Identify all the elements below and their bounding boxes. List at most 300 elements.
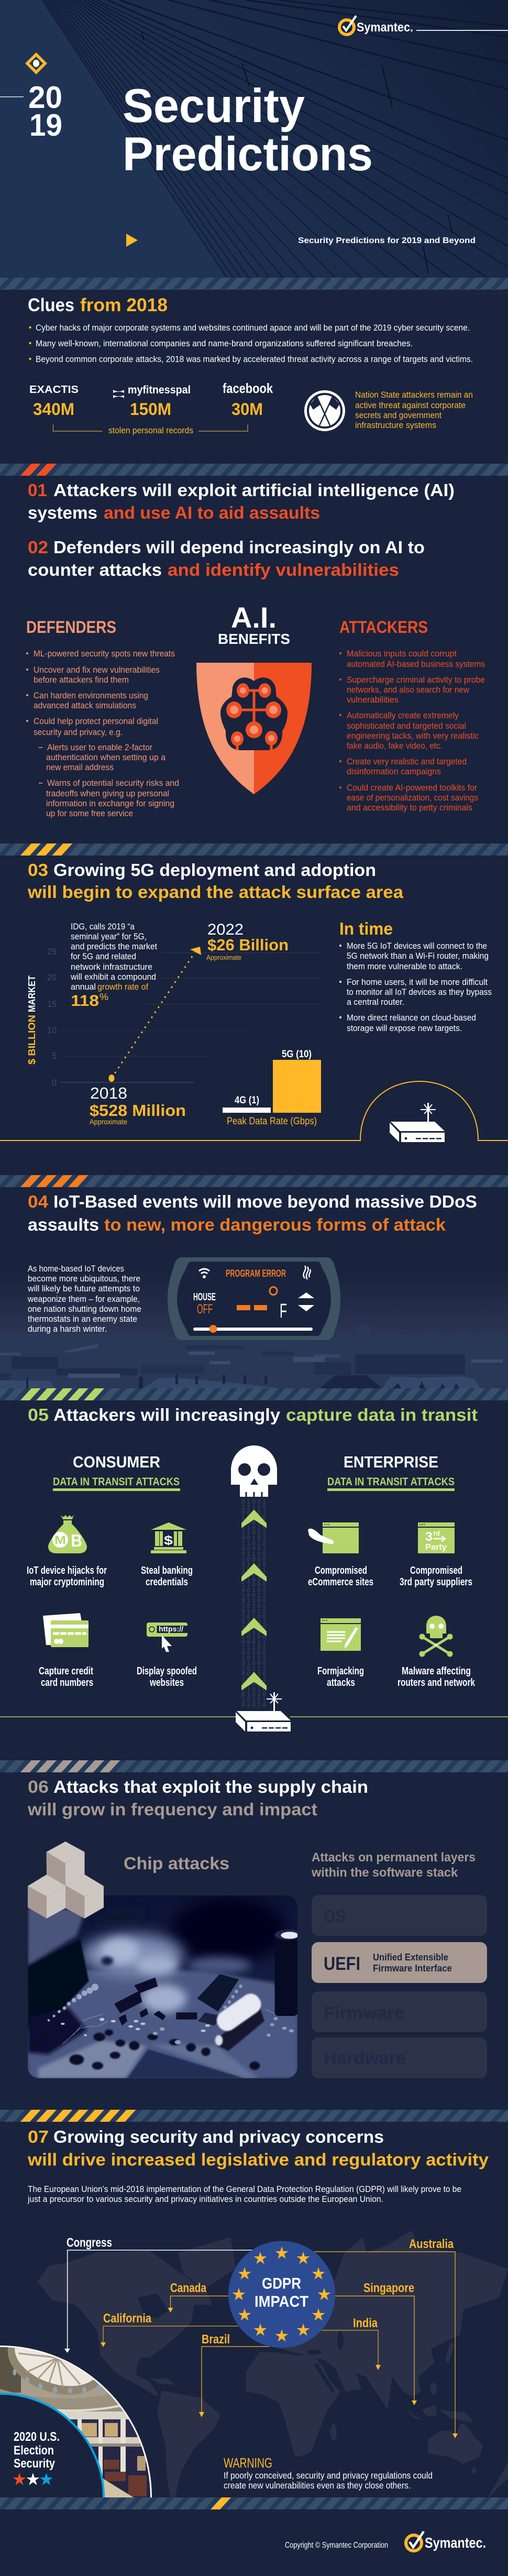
item: banking (141, 1522, 193, 1588)
layer: UEFI (312, 1942, 487, 1983)
heading: 04: 04 (28, 1192, 49, 1211)
title (123, 80, 373, 181)
heading: 05: Attackers will increasingly (53, 1405, 281, 1424)
caption: 3rd party suppliers (400, 1576, 472, 1588)
stat: facebook (223, 380, 273, 419)
bullet list (29, 323, 473, 364)
caption: Formjacking (317, 1665, 364, 1677)
caption: attacks (327, 1677, 355, 1689)
heading: consumer (53, 1453, 180, 1491)
text: IoT description: weaponize them – for example, (27, 1294, 140, 1304)
logo: Symantec: Symantec. (425, 2535, 486, 2551)
callout: nation state (355, 390, 473, 430)
logo: Symantec (406, 2531, 486, 2551)
connector: Canada (168, 2281, 230, 2312)
text: GDPR intro: The European Union’s mid-2018 implementation of the General Data Protection Regulation (GDPR) will likely prove to be (28, 2185, 461, 2194)
binary data stream: 10011 (241, 1592, 268, 1599)
caption: IoT device hijacks for (27, 1565, 107, 1576)
layer: hardware: Hardware (324, 2048, 406, 2067)
list: defenders: authentication when setting up a (46, 753, 166, 762)
item: ecommerce (308, 1522, 373, 1588)
heading: 05: capture data in transit (286, 1405, 478, 1424)
list: attackers: Supercharge criminal activity to probe (347, 675, 485, 685)
binary data stream: 01001 (241, 1498, 268, 1506)
binary data stream: 00101 (241, 1509, 268, 1516)
photo: capitol dome (0, 2345, 152, 2497)
badge: GDPR impact: IMPACT (255, 2293, 308, 2310)
text: IDG callout: seminal year” for 5G, (71, 932, 147, 941)
axis title: $ BILLION (27, 1015, 37, 1065)
callout: warning: WARNING (224, 2455, 272, 2471)
heading: enterprise: ENTERPRISE (344, 1453, 438, 1471)
list: defenders: ML-powered security spots new threats (34, 649, 175, 659)
label: 2018: 2018 (90, 1084, 127, 1102)
bar chart: peak data rate: Peak Data Rate (Gbps) (227, 1116, 317, 1127)
list: defenders: Can harden environments using (34, 691, 148, 700)
list: attackers: networks, and also search for new (347, 685, 469, 695)
binary data stream: 01010 (241, 1525, 268, 1532)
heading: defenders: DEFENDERS (26, 618, 116, 637)
readout (237, 1287, 287, 1322)
icon: flame (303, 1266, 311, 1279)
icon: skull (231, 1445, 277, 1497)
heading: 04: IoT-Based events will move beyond massive DDoS (53, 1192, 477, 1211)
label: 2022: $26 Billion (207, 936, 289, 954)
title: Predictions (123, 128, 373, 181)
binary data stream: 10000 (241, 1555, 268, 1563)
panel: hero (0, 0, 508, 278)
stat: facebook: facebook (223, 380, 273, 396)
item: formjacking (317, 1618, 364, 1689)
binary data stream: 10111 (241, 1654, 268, 1662)
icon: money bag: M (54, 1533, 66, 1547)
caption: Compromised (410, 1565, 462, 1576)
binary data stream: 10001 (241, 1566, 268, 1573)
list: defenders: Could help protect personal digital (34, 717, 158, 726)
list: defenders: tradeoffs when giving up personal (46, 789, 169, 798)
bullet list: Cyber hacks of major corporate systems and websites continued apace and will be part of the 2019 cyber security scene. (36, 323, 470, 333)
icon: skull and bones (419, 1616, 452, 1657)
panel: 2020 election security (0, 2345, 152, 2497)
list: defenders: Alerts user to enable 2-factor (47, 743, 152, 752)
icon: third party (418, 1522, 455, 1553)
list: attackers: ease of personalization, cost savings (347, 793, 478, 803)
subtitle: Security Predictions for 2019 and Beyond (298, 236, 476, 245)
connector: India: India (353, 2316, 378, 2330)
callout: warning (224, 2455, 433, 2491)
list: attackers: vulnerabilities (347, 695, 399, 705)
list: defenders: advanced attack simulations (34, 701, 136, 710)
heading: 07: will drive increased legislative and regulatory activity (27, 2150, 489, 2169)
heading: attacks on permanent layers: Attacks on permanent layers (312, 1850, 476, 1865)
stat: Exactis: 340M (33, 400, 74, 419)
stat: myfitnesspal: 150M (130, 400, 171, 419)
callout: warning: create new vulnerabilities even as they close others. (224, 2480, 411, 2491)
caption (141, 1565, 193, 1588)
heading (28, 295, 168, 315)
caption: credentials (146, 1576, 188, 1588)
list: defenders: Uncover and fix new vulnerabilities (34, 665, 160, 675)
band: section 04 (0, 1175, 508, 1187)
binary data stream: 01001 (241, 1571, 268, 1579)
chart: 5G market growth: 20 (47, 972, 57, 982)
bar chart: peak data rate: 5G (10) (282, 1049, 312, 1060)
list: in time: More 5G IoT devices will connect to the (347, 941, 487, 951)
label: 2018: Approximate (90, 1117, 127, 1126)
item: malware (397, 1616, 476, 1689)
binary data stream: 10001 (241, 1681, 268, 1688)
badge: GDPR impact: GDPR (262, 2275, 301, 2293)
stat: Exactis (29, 384, 79, 419)
callout: nation state: secrets and government (355, 410, 441, 420)
heading: 04: to new, more dangerous forms of attack (104, 1215, 446, 1234)
heading: 06: Attacks that exploit the supply chain (53, 1777, 368, 1796)
caption (397, 1665, 476, 1689)
binary data stream: 00011 (241, 1519, 268, 1527)
chart: 5G market growth: 0 (52, 1078, 57, 1088)
label: house off (193, 1291, 216, 1317)
icon: money bag: B (71, 1531, 82, 1550)
binary data stream: 00001 (241, 1545, 268, 1553)
layer: OS: OS (324, 1906, 346, 1926)
layer: OS (312, 1895, 487, 1936)
heading: 06: 06 (28, 1777, 49, 1796)
text: IoT description: will likely be future attempts to (27, 1284, 140, 1294)
layer: UEFI: Unified Extensible (373, 1952, 448, 1963)
badge: GDPR impact (228, 2241, 335, 2348)
icon: arrow (126, 234, 138, 247)
photo: circuit board (28, 1895, 301, 2078)
list: attackers: sophisticated and targeted social (347, 721, 466, 731)
band: section 06 (0, 1760, 508, 1772)
list: in time: them more vulnerable to attack. (347, 962, 462, 971)
heading: enterprise (327, 1453, 455, 1491)
heading: 01 (28, 480, 455, 522)
binary data stream: 00100 (241, 1587, 268, 1594)
heading: 06: will grow in frequency and impact (27, 1800, 317, 1819)
caption (27, 1565, 107, 1588)
label: election security: Security (14, 2457, 56, 2471)
callout: nation state: infrastructure systems (355, 420, 436, 430)
binary data stream: 10010 (241, 1624, 268, 1631)
binary data stream: 10100 (241, 1613, 268, 1620)
heading: AI benefits: BENEFITS (218, 631, 290, 647)
list: defenders: Warns of potential security risks and (47, 779, 179, 788)
stat: myfitnesspal (113, 384, 191, 419)
text: IoT description: one nation shutting down home (28, 1304, 141, 1314)
caption: card numbers (41, 1677, 93, 1689)
list: in time: For home users, it will be more difficult (347, 978, 488, 987)
heading: AI benefits: A.I. (231, 601, 277, 634)
callout: warning: If poorly conceived, security and privacy regulations could (224, 2470, 433, 2481)
logo: Symantec: Symantec. (357, 20, 413, 35)
stat: myfitnesspal: myfitnesspal (128, 384, 191, 396)
band (0, 278, 508, 290)
list: attackers: Malicious inputs could corrupt (347, 649, 457, 659)
chart: 5G market growth (27, 921, 321, 1126)
binary data stream: 10010 (241, 1514, 268, 1521)
text: IoT description: become more ubiquitous, there (28, 1274, 140, 1284)
heading: consumer: CONSUMER (73, 1453, 160, 1471)
heading: enterprise: DATA IN TRANSIT ATTACKS (327, 1476, 455, 1488)
heading: 01: 01 (28, 480, 47, 500)
heading: chip attacks: Chip attacks (124, 1854, 229, 1873)
thermostat (168, 1257, 340, 1340)
list: in time: storage will expose new targets. (347, 1024, 462, 1033)
binary data stream: 01100 (241, 1597, 268, 1605)
label: 2018 (90, 1084, 186, 1126)
band: footer (0, 2497, 508, 2509)
binary data stream: 11011 (241, 1530, 268, 1537)
list: defenders: up for some free service (46, 809, 133, 818)
band: section 05 (0, 1388, 508, 1400)
item: third party (400, 1522, 472, 1588)
binary data stream: 10011 (241, 1675, 268, 1683)
heading: 07 (27, 2127, 489, 2169)
binary data stream: 11110 (241, 1504, 268, 1511)
connector: Singapore: Singapore (363, 2281, 414, 2295)
icon: cubes (28, 1841, 104, 1919)
caption: Malware affecting (402, 1665, 471, 1677)
caption (317, 1665, 364, 1689)
text: IDG callout: % (100, 992, 108, 1002)
layer: UEFI: UEFI (324, 1954, 360, 1974)
binary data stream: 10111 (241, 1665, 268, 1672)
caption: websites (149, 1677, 184, 1689)
icon: shield with brain (196, 663, 312, 794)
copyright: Copyright © Symantec Corporation (285, 2541, 388, 2550)
heading: 02: 02 (28, 538, 48, 557)
icon: bank: $ (164, 1533, 173, 1548)
binary data stream: 01110 (241, 1551, 268, 1558)
label: election security: 2020 U.S. (14, 2430, 60, 2444)
heading: 02: and identify vulnerabilities (168, 560, 399, 579)
binary data stream: 00110 (241, 1629, 268, 1636)
binary data stream: 01000 (241, 1660, 268, 1667)
bracket: stolen personal records: stolen personal records (108, 426, 193, 435)
panel: AI benefits (196, 601, 312, 794)
icon: third party: 3 (425, 1530, 433, 1544)
text: IoT description: thermostats in an enemy state (28, 1314, 137, 1324)
year 2019: 20 (28, 80, 62, 115)
axis title (27, 975, 37, 1065)
label: election security (14, 2430, 60, 2471)
binary data stream: 01010 (241, 1702, 268, 1709)
list: defenders (26, 649, 179, 818)
label: 2018: $528 Million (90, 1101, 186, 1120)
binary data stream: 01110 (241, 1561, 268, 1568)
text: GDPR intro (27, 2185, 461, 2204)
chart: 5G market growth: 10 (47, 1025, 57, 1035)
label: program error: PROGRAM ERROR (226, 1268, 286, 1279)
heading: 01: and use AI to aid assaults (104, 503, 320, 522)
chart: 5G market growth: 5 (52, 1051, 57, 1061)
list: in time: to monitor all IoT devices as they bypass (347, 988, 492, 997)
binary data stream: 10101 (241, 1696, 268, 1704)
list: attackers: and accessibility to petty criminals (347, 803, 472, 813)
list: in time: 5G network than a Wi-Fi router, making (347, 951, 489, 961)
connector: Congress (64, 2236, 252, 2353)
item: credit cards (39, 1613, 93, 1689)
binary data stream: 00010 (241, 1670, 268, 1678)
text: IoT description: during a harsh winter. (28, 1324, 107, 1334)
callout: nation state: Nation State attackers remain an (355, 390, 473, 400)
list: attackers: disinformation campaigns (347, 767, 441, 776)
heading: 02 (28, 538, 425, 579)
connector: California: California (103, 2311, 152, 2326)
text: IDG callout (70, 922, 157, 1010)
caption: Compromised (315, 1565, 367, 1576)
text: IDG callout: network infrastructure (71, 962, 152, 972)
label: house off: HOUSE (193, 1291, 216, 1303)
binary data stream: 01010 (241, 1691, 268, 1698)
caption (39, 1665, 93, 1689)
title: Security (123, 80, 305, 133)
heading: 01: systems (28, 503, 97, 522)
panel: section 04 background city (0, 1187, 508, 1388)
text: IoT description: As home-based IoT devices (28, 1264, 124, 1274)
heading: attacks on permanent layers (311, 1850, 476, 1880)
connector: California (101, 2311, 238, 2347)
binary data stream: 00011 (241, 1639, 268, 1647)
caption (308, 1565, 373, 1588)
heading: 05: 05 (28, 1405, 49, 1424)
icon: third party: Party (425, 1543, 447, 1552)
heading: attackers: ATTACKERS (339, 618, 428, 637)
controls (193, 1292, 314, 1333)
stat: facebook: 30M (231, 400, 263, 419)
label: 2022 (206, 921, 289, 961)
icon: stars (13, 2473, 53, 2485)
logo: Symantec (339, 16, 508, 35)
binary data stream: 01010 (241, 1686, 268, 1693)
connector: Congress: Congress (67, 2236, 112, 2250)
heading: 03: will begin to expand the attack surface area (27, 882, 404, 902)
connector: India (321, 2316, 381, 2370)
layer: UEFI: Firmware Interface (373, 1963, 452, 1974)
heading: 07: 07 (28, 2127, 49, 2146)
label: house off: OFF (197, 1302, 213, 1317)
list: attackers (339, 649, 485, 813)
footer (285, 2531, 486, 2551)
year 2019: 19 (29, 108, 62, 142)
label: 2022: 2022 (207, 921, 244, 938)
list: in time (339, 941, 492, 1033)
list: attackers: engineering tacks, with very realistic (347, 731, 479, 741)
heading: 03 (27, 860, 404, 902)
binary data stream: 01010 (241, 1608, 268, 1615)
trend arrow (109, 947, 201, 1082)
list: in time: a central router. (347, 997, 404, 1007)
diagram: GDPR impact (64, 2236, 458, 2438)
text: IDG callout: 118 (71, 992, 99, 1010)
axis title: MARKET (27, 975, 37, 1012)
icon: diamond (25, 52, 47, 74)
connector: Australia (314, 2237, 458, 2438)
list: attackers: Create very realistic and targeted (347, 757, 467, 766)
list: defenders: before attackers find them (34, 675, 129, 685)
heading: 06 (27, 1777, 368, 1819)
readout: F (280, 1300, 287, 1322)
item: spoofed websites (137, 1623, 197, 1689)
connector: Singapore (335, 2281, 417, 2405)
binary data stream: 00101 (241, 1535, 268, 1542)
binary data stream: 01010 (241, 1576, 268, 1584)
icon: third party: rd (433, 1529, 440, 1537)
caption: Steal banking (141, 1565, 193, 1576)
heading: attacks on permanent layers: within the software stack (311, 1866, 458, 1880)
label: election security: Election (14, 2443, 54, 2458)
icon: router on network line (0, 1692, 508, 1731)
heading: Clues (28, 295, 74, 315)
heading: 04 (28, 1192, 477, 1234)
list: defenders: new email address (46, 763, 114, 772)
band: section 07 (0, 2110, 508, 2122)
caption (400, 1565, 472, 1588)
connector: Canada: Canada (170, 2281, 207, 2295)
panel: attackers (339, 618, 485, 813)
band: section 03 (0, 843, 508, 856)
caption: eCommerce sites (308, 1576, 373, 1588)
binary data stream: 10100 (241, 1634, 268, 1641)
heading: 01: Attackers will exploit artificial intelligence (AI) (53, 480, 455, 500)
text: IDG callout: and predicts the market (71, 942, 157, 951)
text: IDG callout: will exhibit a compound (70, 972, 156, 982)
list: defenders: security and privacy, e.g. (34, 728, 123, 737)
stat: Exactis: EXACTIS (29, 384, 79, 396)
bullet list: Beyond common corporate attacks, 2018 was marked by accelerated threat activity across a range of targets and victims. (36, 355, 473, 364)
panel: in time (339, 919, 492, 1033)
year 2019 (0, 80, 62, 142)
binary data stream: 11000 (241, 1582, 268, 1589)
world map (37, 2230, 508, 2499)
icon: browser with feather (308, 1522, 359, 1553)
bar chart: peak data rate: 4G (1) (235, 1095, 259, 1106)
bracket: stolen personal records (53, 424, 248, 435)
bullet list: Many well-known, international companies and name-brand organizations suffered significant breaches. (36, 339, 413, 348)
binary data stream: 00100 (241, 1650, 268, 1657)
heading: 03: Growing 5G deployment and adoption (53, 860, 376, 880)
heading: AI benefits (218, 601, 290, 647)
binary data stream: 11101 (241, 1645, 268, 1652)
label: 2022: Approximate (206, 953, 241, 961)
list: attackers: automated AI-based business systems (347, 660, 485, 669)
caption: Capture credit (39, 1665, 93, 1677)
heading: 02: Defenders will depend increasingly on AI to (53, 538, 425, 557)
panel: clues from 2018 (28, 295, 473, 435)
text: IDG callout: for 5G and related (71, 952, 136, 961)
icon: credit cards (43, 1613, 89, 1647)
chart: 5G market growth: 15 (47, 999, 57, 1009)
text: IDG callout: growth rate of (97, 982, 148, 992)
item: cryptomining (27, 1515, 107, 1588)
icon: crossed flags (306, 392, 344, 430)
heading: consumer: DATA IN TRANSIT ATTACKS (53, 1476, 180, 1488)
panel: defenders (26, 618, 179, 818)
heading: in time: In time (339, 919, 393, 938)
caption: routers and network (397, 1677, 476, 1689)
layer: firmware (312, 1991, 487, 2032)
heading: 02: counter attacks (28, 560, 162, 579)
binary data stream: 01011 (241, 1618, 268, 1626)
text: GDPR intro: just a precursor to various security and privacy initiatives in countries outside the European Union. (27, 2195, 383, 2204)
list: defenders: information in exchange for signing (46, 799, 174, 808)
caption: major cryptomining (30, 1576, 104, 1588)
icon: form and pencil (321, 1618, 361, 1651)
chevrons (241, 1510, 267, 1690)
list: in time: More direct reliance on cloud-based (347, 1013, 476, 1023)
heading: 07: Growing security and privacy concerns (53, 2127, 384, 2146)
